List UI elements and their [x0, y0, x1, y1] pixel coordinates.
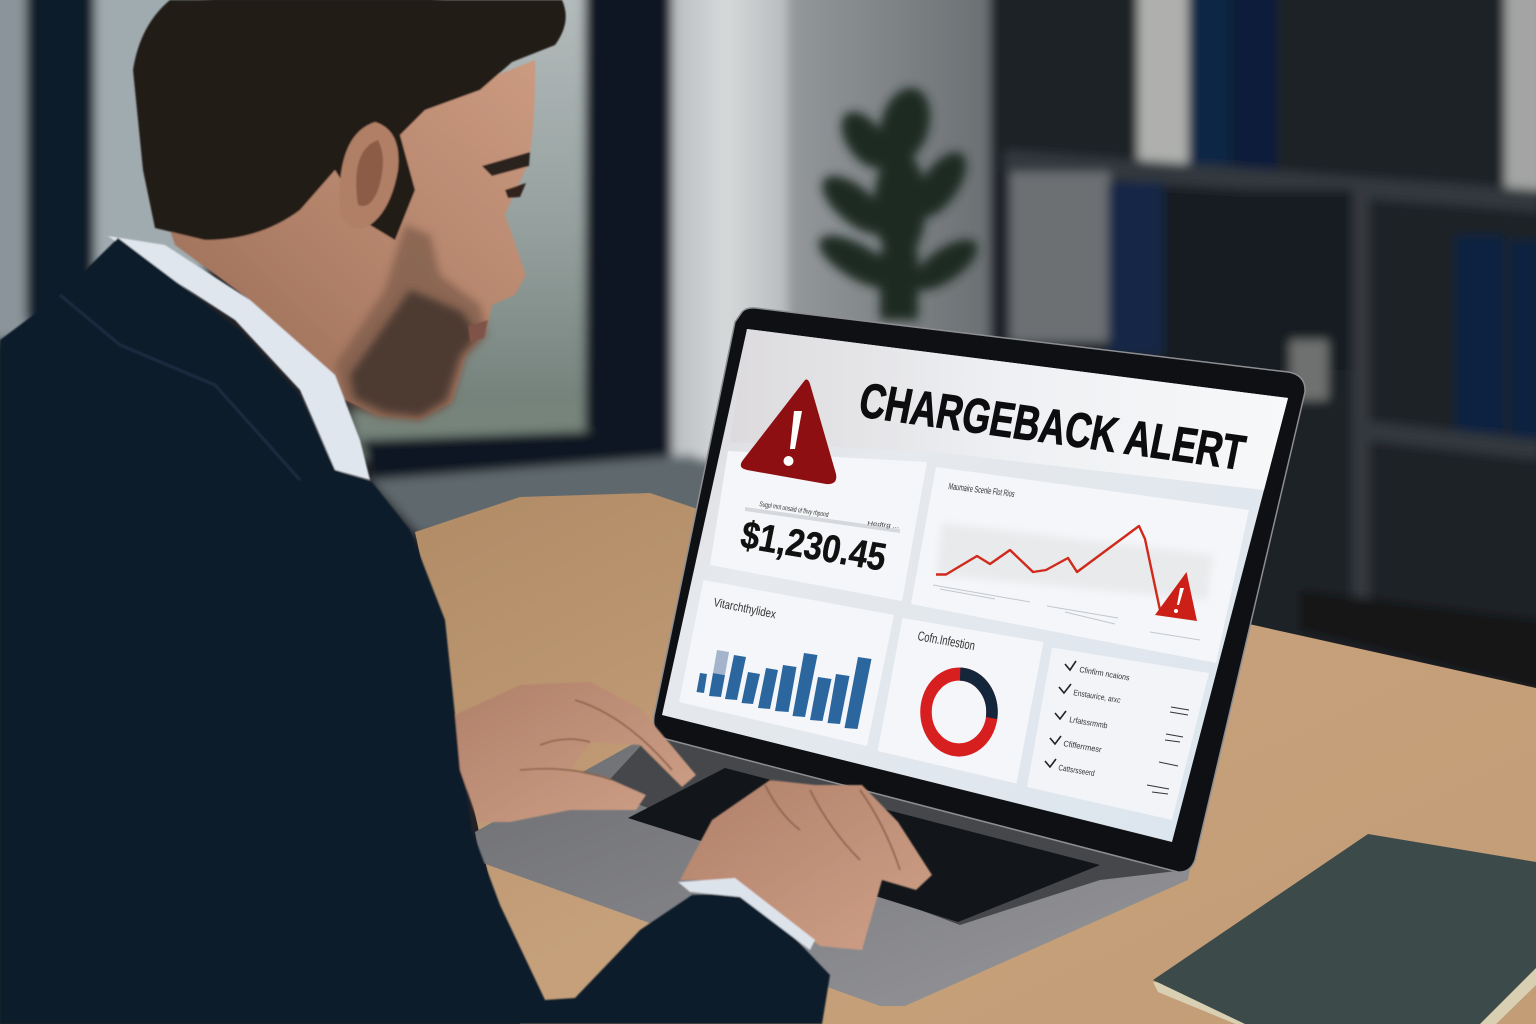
screen — [662, 329, 1288, 842]
check item 1: Cfinfirm ncaions — [1079, 665, 1130, 682]
check item 3 — [1055, 711, 1109, 730]
amount caption: Sugpl mnt unsaid of fhvy rhpond — [759, 500, 829, 519]
suit jacket — [0, 238, 830, 1024]
keyboard — [628, 768, 1100, 922]
shirt collar — [108, 236, 370, 480]
chart line — [936, 526, 1160, 610]
beard — [350, 290, 478, 416]
man — [0, 0, 932, 1024]
check item 2: Enstaurice, arxc — [1073, 688, 1121, 705]
panel: checklist — [1027, 648, 1209, 820]
check item 4: Cfifferrmesr — [1063, 739, 1103, 754]
check item 3: Lrfatssrmmb — [1069, 715, 1109, 730]
shirt cuff — [678, 878, 815, 950]
check item 1 — [1065, 661, 1130, 682]
hair — [133, 0, 566, 240]
keyboard deck — [600, 725, 1185, 925]
chart backdrop band — [936, 523, 1213, 600]
donut title: Cofn.Infestion — [916, 628, 976, 653]
check item 2 — [1059, 684, 1121, 705]
donut ring — [925, 673, 993, 751]
lapel line — [60, 295, 300, 480]
neck and face — [160, 60, 535, 420]
chart footnotes — [933, 585, 1200, 640]
eyebrow — [482, 152, 530, 176]
desk surface — [415, 493, 1536, 1024]
lips — [468, 320, 488, 342]
bars — [696, 653, 872, 729]
laptop base — [475, 740, 1190, 1006]
highlighted bar segment — [713, 650, 729, 675]
bar chart title: Vitarchthylidex — [712, 595, 777, 621]
panel: donut chart — [878, 618, 1044, 784]
stubble shadow — [335, 225, 488, 422]
icon: large warning triangle — [741, 380, 836, 484]
amount side note: Hedtrg ... — [867, 520, 900, 530]
title band — [730, 329, 1288, 490]
panel: chargeback amount — [710, 451, 927, 601]
title: chargeback alert: CHARGEBACK ALERT — [855, 374, 1250, 481]
notebook on desk — [1153, 834, 1536, 1024]
eye — [505, 183, 526, 198]
check item 4 — [1050, 736, 1103, 754]
panel: line chart — [911, 467, 1249, 663]
left hand on keyboard — [455, 682, 696, 822]
check item 5 — [1045, 759, 1095, 778]
amount value: $1,230.45 — [737, 514, 890, 580]
panel: bar chart — [679, 580, 894, 746]
laptop — [475, 308, 1305, 1006]
chart title: Maumaire Scenle Flot Rios — [948, 481, 1016, 499]
right hand on keyboard — [680, 780, 932, 950]
check item 5: Cattsrsseerd — [1058, 763, 1095, 778]
laptop lid bezel — [654, 308, 1305, 872]
ear — [339, 122, 399, 229]
icon: potted plant — [811, 82, 985, 320]
icon: small warning triangle — [1155, 572, 1197, 621]
